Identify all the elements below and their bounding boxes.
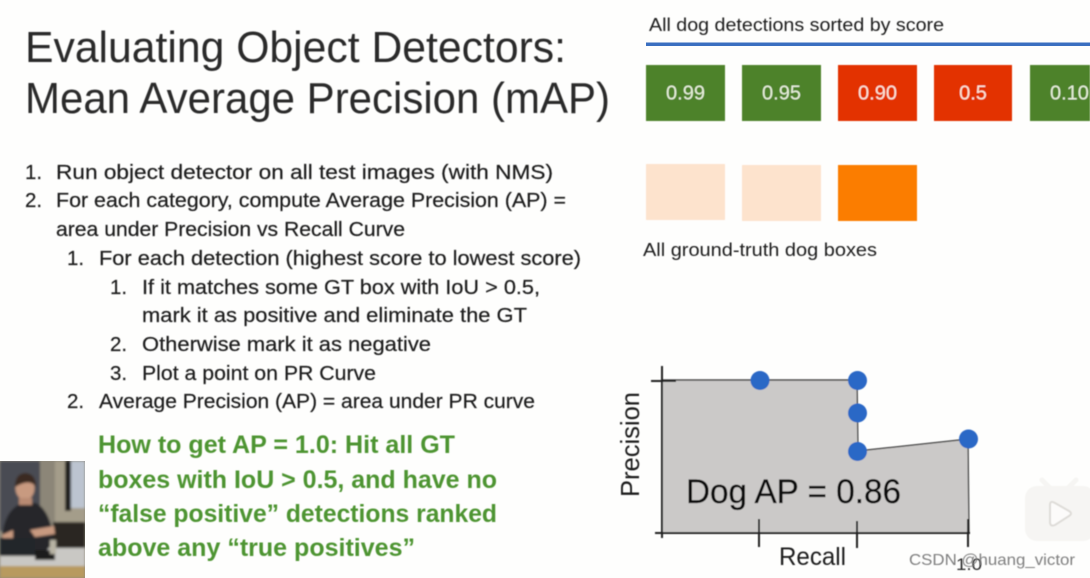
text block: steps list: For each detection (highest score to lowest score) bbox=[99, 247, 581, 270]
title: Evaluating Object Detectors: bbox=[25, 23, 566, 72]
callout: how to get AP 1.0: “false positive” detections ranked bbox=[98, 500, 497, 528]
detection 0.10: 0.10 bbox=[1050, 82, 1089, 104]
text block: steps list: 2. bbox=[110, 333, 127, 356]
curve lines bbox=[663, 380, 969, 533]
detection 0.95 bbox=[742, 65, 821, 121]
callout: how to get AP 1.0 bbox=[98, 431, 497, 562]
divider line bbox=[646, 42, 1090, 46]
detection 0.95: 0.95 bbox=[762, 82, 801, 104]
detection 0.10 bbox=[1030, 65, 1090, 121]
ground-truth boxes bbox=[646, 164, 917, 221]
area under curve bbox=[663, 380, 968, 533]
text block: steps list: Average Precision (AP) = area under PR curve bbox=[99, 390, 535, 413]
text block: steps list: 1. bbox=[67, 247, 84, 270]
text block: steps list: mark it as positive and eliminate the GT bbox=[142, 304, 528, 327]
text block: steps list: 2. bbox=[25, 189, 42, 212]
y axis label: Precision bbox=[615, 392, 645, 497]
callout: how to get AP 1.0: above any “true positives” bbox=[98, 534, 415, 562]
detection 0.5 bbox=[934, 65, 1012, 121]
icon: video play badge bbox=[1025, 480, 1090, 541]
text block: steps list: Plot a point on PR Curve bbox=[142, 362, 376, 385]
detection 0.99: 0.99 bbox=[666, 82, 705, 104]
text block: steps list: 1. bbox=[110, 276, 127, 299]
detection 0.90 bbox=[838, 65, 917, 121]
text block: steps list: If it matches some GT box with IoU > 0.5, bbox=[142, 276, 540, 299]
text block: steps list: 3. bbox=[110, 362, 127, 385]
text block: steps list: For each category, compute Average Precision (AP) = bbox=[56, 189, 566, 212]
text block: steps list bbox=[25, 161, 581, 413]
detection boxes bbox=[646, 65, 1090, 121]
AP value: Dog AP = 0.86 bbox=[686, 473, 901, 511]
title: Mean Average Precision (mAP) bbox=[25, 74, 610, 123]
text block: steps list: 2. bbox=[67, 390, 84, 413]
label: ground truth: All ground-truth dog boxes bbox=[643, 239, 877, 260]
callout: how to get AP 1.0: How to get AP = 1.0: Hit all GT bbox=[98, 431, 455, 459]
title bbox=[25, 23, 610, 123]
text block: steps list: area under Precision vs Recall Curve bbox=[56, 218, 405, 241]
tick label: 1.0 bbox=[956, 555, 982, 574]
detection 0.99 bbox=[646, 65, 725, 121]
axes and ticks bbox=[651, 366, 970, 548]
text block: steps list: 1. bbox=[25, 161, 42, 184]
data points bbox=[750, 371, 978, 461]
speaker photo bbox=[0, 461, 85, 578]
detection 0.5: 0.5 bbox=[959, 82, 987, 104]
callout: how to get AP 1.0: boxes with IoU > 0.5, and have no bbox=[98, 466, 497, 494]
watermark: CSDN @huang_victor bbox=[909, 552, 1076, 569]
text block: steps list: Otherwise mark it as negative bbox=[142, 333, 431, 356]
text block: steps list: Run object detector on all test images (with NMS) bbox=[56, 161, 553, 184]
x axis label: Recall bbox=[779, 543, 846, 571]
heading: all dog detections: All dog detections sorted by score bbox=[649, 14, 944, 35]
chart: precision recall curve bbox=[615, 366, 982, 574]
detection 0.90: 0.90 bbox=[858, 82, 897, 104]
